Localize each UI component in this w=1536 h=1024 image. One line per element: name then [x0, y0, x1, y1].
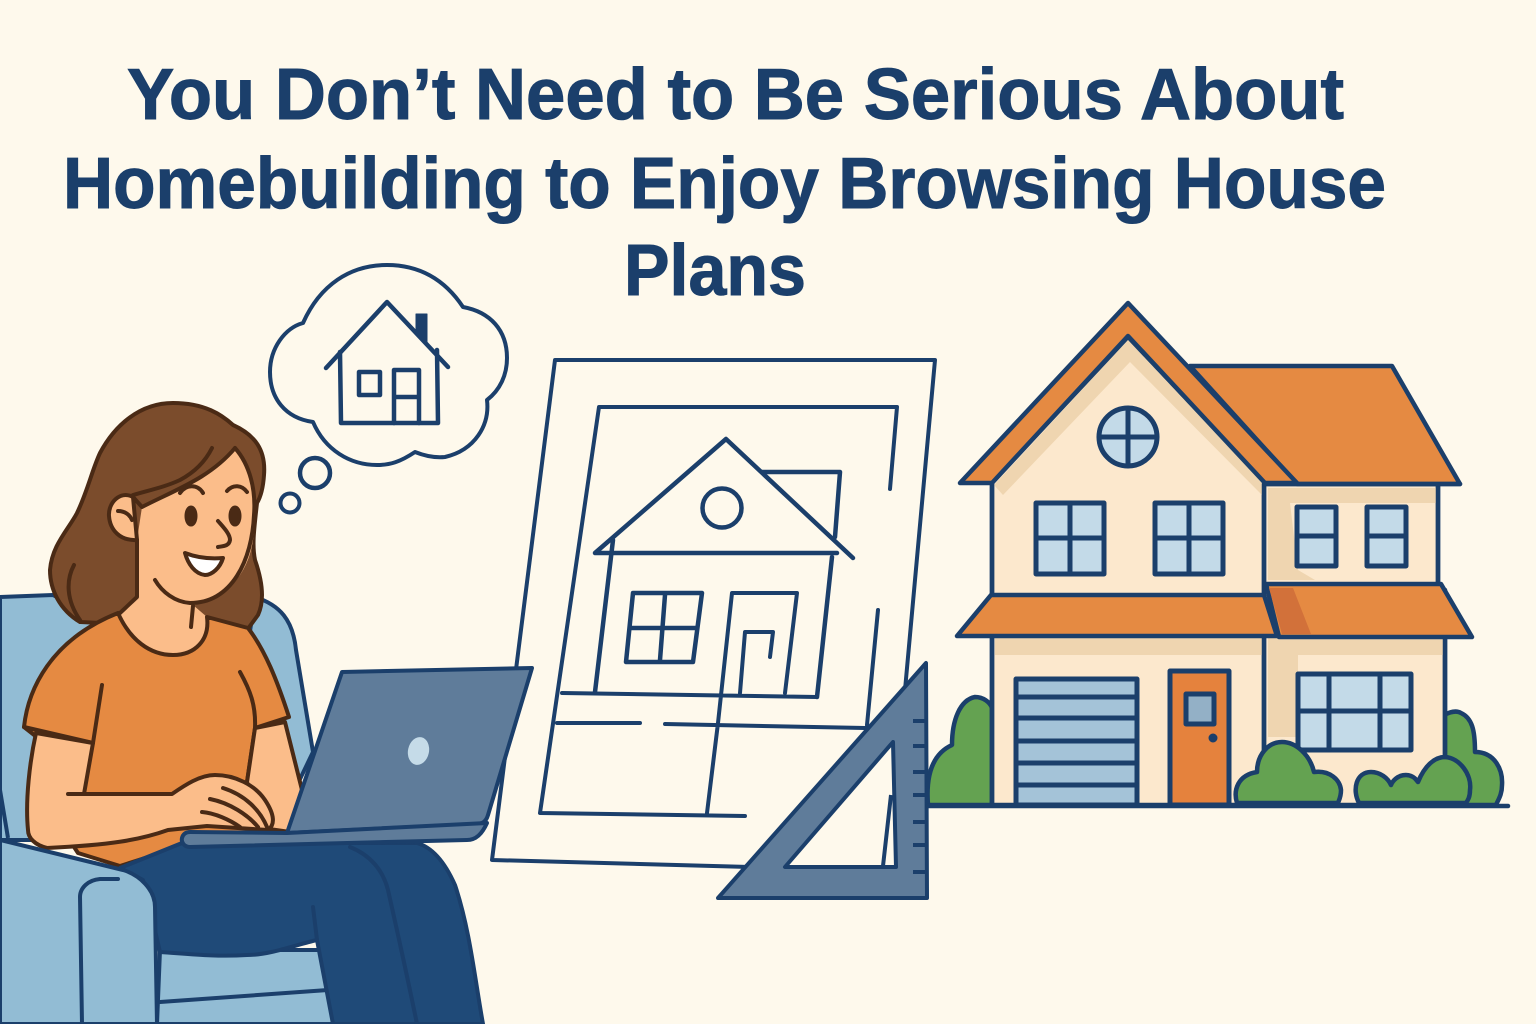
porch roofs [957, 584, 1472, 637]
garage door [1016, 679, 1137, 805]
title [63, 55, 1386, 311]
title: Plans [624, 231, 806, 311]
shirt [24, 613, 289, 866]
pants and armchair front [0, 840, 483, 1024]
front bushes [1236, 742, 1470, 803]
icon: small house in thought [326, 302, 448, 423]
neck and face [109, 448, 255, 655]
walls [992, 337, 1445, 805]
pants [120, 843, 483, 1024]
right arm [247, 722, 302, 832]
house [928, 303, 1508, 806]
laptop [182, 668, 532, 847]
blueprint sheet [492, 360, 935, 867]
bushes behind house [928, 697, 1502, 805]
rear roof [1190, 366, 1460, 484]
upper windows [1036, 503, 1406, 574]
armchair arm [0, 840, 157, 1024]
title: You Don’t Need to Be Serious About [127, 55, 1344, 135]
left arm and hand [27, 733, 273, 848]
title: Homebuilding to Enjoy Browsing House [63, 144, 1386, 224]
thought bubble with house [270, 265, 507, 512]
set square ruler [718, 663, 927, 898]
front door [1170, 671, 1229, 805]
round window [1099, 408, 1157, 466]
armchair back [0, 595, 313, 840]
ground line [928, 804, 1508, 808]
gable roof [960, 303, 1297, 483]
lower window [1298, 674, 1411, 750]
hair [50, 403, 264, 630]
blueprint house drawing [595, 439, 853, 697]
woman [24, 403, 302, 866]
